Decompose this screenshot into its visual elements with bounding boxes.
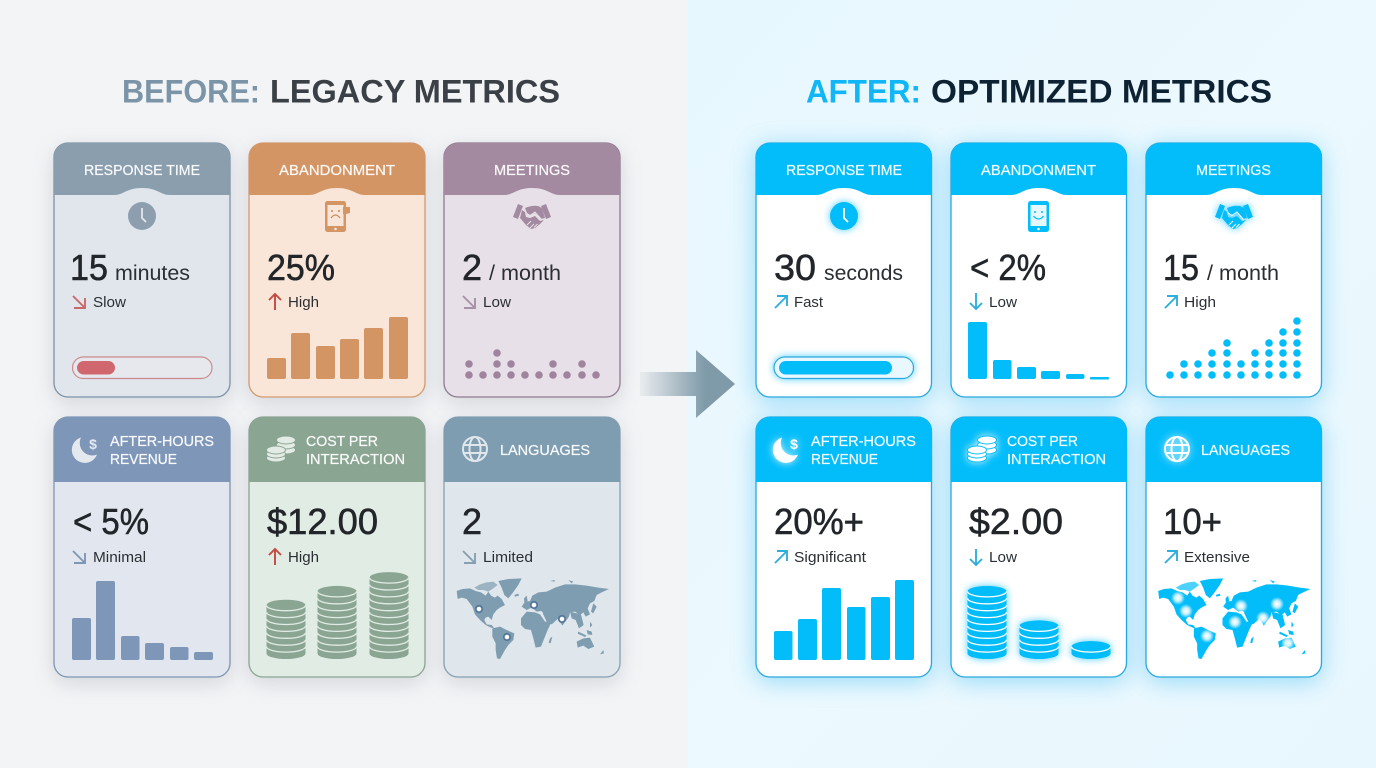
card background xyxy=(1146,417,1322,677)
card background xyxy=(249,417,425,677)
heading: LANGUAGES xyxy=(500,443,590,459)
panel: after meetings xyxy=(1146,143,1322,397)
panel: after languages xyxy=(1146,417,1322,677)
title: before legacy metrics: BEFORE: xyxy=(122,74,260,110)
bar chart xyxy=(774,580,914,660)
value: 20%+ xyxy=(774,501,864,542)
icon: clock xyxy=(128,202,156,230)
card header xyxy=(756,417,932,482)
card header xyxy=(444,417,620,482)
value: 2 xyxy=(462,501,482,542)
value: $12.00 xyxy=(267,501,378,542)
dot chart xyxy=(465,349,600,379)
panel: after abandonment xyxy=(951,143,1127,397)
heading xyxy=(306,434,405,468)
label: Significant xyxy=(794,549,867,566)
heading: AFTER-HOURS xyxy=(110,434,214,450)
bar chart xyxy=(72,581,213,660)
value: 15 xyxy=(1163,247,1199,288)
icon: clock xyxy=(830,202,858,230)
icon: coins xyxy=(968,436,996,462)
panel: before cost per interaction xyxy=(249,417,425,677)
icon: up arrow xyxy=(269,549,281,565)
card background xyxy=(249,143,425,397)
card header xyxy=(249,417,425,482)
world map xyxy=(457,578,609,659)
heading: RESPONSE TIME xyxy=(786,163,902,179)
value: < 2% xyxy=(970,247,1046,288)
icon: globe xyxy=(1165,437,1189,461)
label: Minimal xyxy=(93,549,146,566)
card background xyxy=(1146,143,1322,397)
icon: up-right arrow xyxy=(1165,551,1177,563)
icon: slow arrow xyxy=(73,296,85,308)
label: High xyxy=(288,549,319,566)
card header xyxy=(1146,143,1322,195)
heading: INTERACTION xyxy=(306,452,405,468)
heading: ABANDONMENT xyxy=(981,163,1096,179)
panel: before meetings xyxy=(444,143,620,397)
card background xyxy=(54,417,230,677)
heading: RESPONSE TIME xyxy=(84,163,200,179)
heading: INTERACTION xyxy=(1007,452,1106,468)
panel: before abandonment xyxy=(249,143,425,397)
value: 30 xyxy=(774,247,816,288)
heading xyxy=(811,434,916,468)
label: Fast xyxy=(794,294,824,311)
icon: coins xyxy=(266,436,296,462)
icon: moon and dollar: $ xyxy=(89,436,97,452)
heading: COST PER xyxy=(306,434,378,450)
card background xyxy=(951,143,1126,397)
icon: happy phone xyxy=(1028,201,1049,232)
heading: AFTER-HOURS xyxy=(811,434,916,450)
icon: down arrow xyxy=(970,293,982,309)
heading: LANGUAGES xyxy=(1201,443,1290,459)
label: Extensive xyxy=(1184,549,1250,566)
icon: globe xyxy=(463,437,487,461)
heading xyxy=(1007,434,1106,468)
arrow: before to after xyxy=(640,350,735,418)
label: Low xyxy=(483,294,511,311)
title: before legacy metrics xyxy=(122,74,560,110)
icon: low arrow xyxy=(463,296,475,308)
card header xyxy=(1146,417,1322,482)
card background xyxy=(756,143,932,397)
value: 15 xyxy=(70,247,108,288)
card background xyxy=(951,417,1126,677)
background: after side xyxy=(688,0,1376,768)
label: Limited xyxy=(483,549,533,566)
panel: before languages xyxy=(444,417,620,677)
panel: after cost per interaction xyxy=(951,417,1127,677)
unit: minutes xyxy=(115,262,190,285)
panel: after response time xyxy=(756,143,932,397)
title: after optimized metrics: OPTIMIZED METRICS xyxy=(931,74,1272,110)
label: Low xyxy=(989,549,1017,566)
value: 2 xyxy=(462,247,482,288)
card background xyxy=(54,143,230,397)
label: High xyxy=(1184,294,1216,311)
panel: before response time xyxy=(54,143,230,397)
progress bar xyxy=(72,357,212,378)
card header xyxy=(444,143,620,195)
icon: down arrow xyxy=(73,551,85,563)
heading: REVENUE xyxy=(811,452,878,468)
icon: moon and dollar xyxy=(72,436,97,463)
value: 10+ xyxy=(1163,501,1222,542)
icon: moon and dollar xyxy=(773,436,798,463)
icon: up-right arrow xyxy=(1165,296,1177,308)
card header xyxy=(756,143,932,195)
unit: / month xyxy=(1207,262,1279,285)
card background xyxy=(444,417,620,677)
value: $2.00 xyxy=(969,501,1063,542)
value: < 5% xyxy=(73,501,149,542)
heading: ABANDONMENT xyxy=(279,163,395,179)
card header xyxy=(54,143,230,195)
title: before legacy metrics: LEGACY METRICS xyxy=(270,74,560,110)
heading xyxy=(110,434,214,468)
heading: COST PER xyxy=(1007,434,1078,450)
label: High xyxy=(288,294,319,311)
card header xyxy=(249,143,425,195)
coin stacks xyxy=(266,572,408,659)
coin stacks xyxy=(968,586,1110,659)
unit: / month xyxy=(489,262,561,285)
progress bar xyxy=(774,357,914,378)
bar chart xyxy=(968,322,1109,380)
background: before side xyxy=(0,0,688,768)
icon: down arrow xyxy=(463,551,475,563)
card header xyxy=(951,143,1127,195)
card background xyxy=(444,143,620,397)
unit: seconds xyxy=(824,262,903,285)
panel: before after-hours revenue xyxy=(54,417,230,677)
icon: up arrow xyxy=(269,294,281,310)
world map xyxy=(1158,578,1310,659)
heading: MEETINGS xyxy=(494,163,570,179)
icon: up-right arrow xyxy=(775,551,787,563)
icon: down arrow xyxy=(970,549,982,565)
heading: MEETINGS xyxy=(1196,163,1271,179)
icon: sad phone xyxy=(325,201,350,232)
value: 25% xyxy=(267,247,335,288)
icon: moon and dollar: $ xyxy=(790,436,798,452)
icon: handshake xyxy=(1215,204,1253,229)
title: after optimized metrics: AFTER: xyxy=(806,74,921,110)
card header xyxy=(54,417,230,482)
icon: handshake xyxy=(513,204,551,229)
panel: after after-hours revenue xyxy=(756,417,932,677)
label: Slow xyxy=(93,294,126,311)
label: Low xyxy=(989,294,1017,311)
bar chart xyxy=(267,317,408,379)
card header xyxy=(951,417,1127,482)
heading: REVENUE xyxy=(110,452,177,468)
dot chart xyxy=(1166,317,1301,379)
card background xyxy=(756,417,932,677)
icon: fast arrow xyxy=(775,296,787,308)
